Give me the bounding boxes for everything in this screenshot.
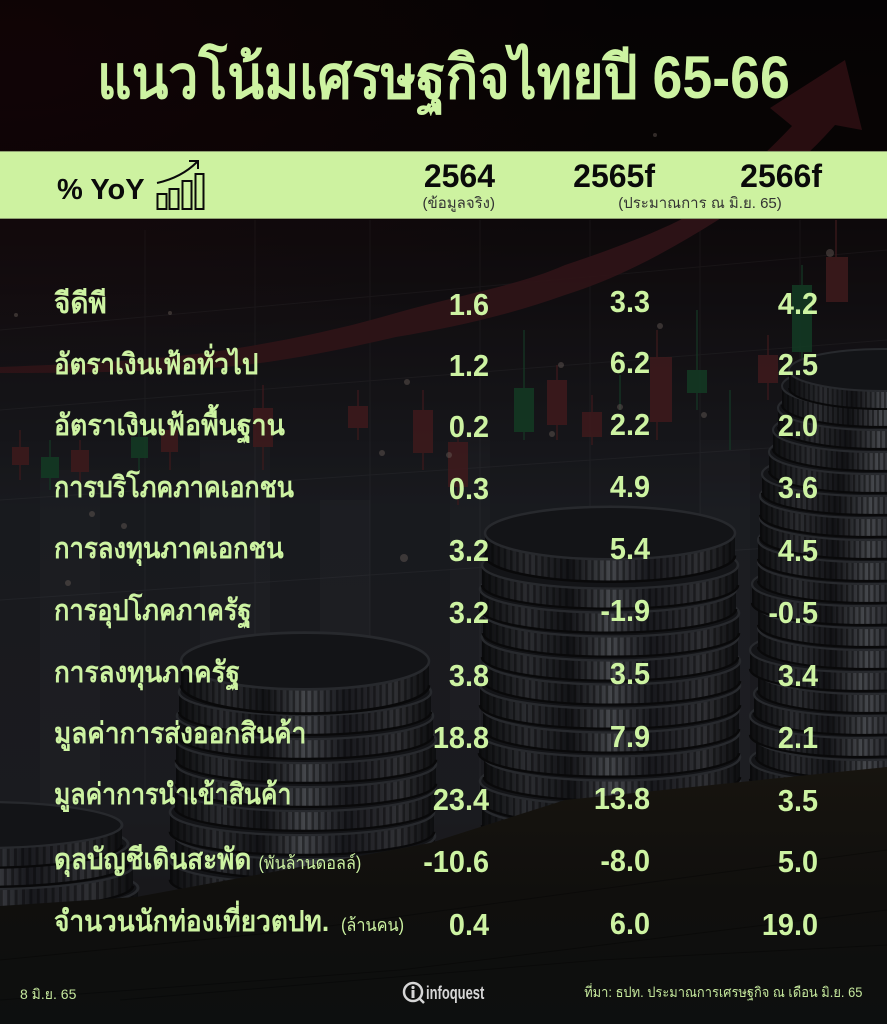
coin stack: far left [0,802,138,931]
row: GDP: 4.2 [778,286,818,321]
row: government investment: 3.8 [449,658,489,693]
row: exports [54,718,818,755]
footer date: 8 มิ.ย. 65 [20,986,76,1002]
row: government consumption: -1.9 [600,593,650,628]
row: exports: 2.1 [778,720,818,755]
row: GDP [54,284,818,322]
row: core inflation [54,404,818,444]
candlestick chart [12,220,848,505]
coin stack: far right [750,349,887,801]
row: foreign tourists [54,900,818,942]
row: imports: มูลค่าการนำเข้าสินค้า [54,779,291,811]
row: exports: 7.9 [610,719,650,754]
row: foreign tourists: จำนวนนักท่องเที่ยวตปท. (ล้านคน) [54,906,404,938]
row: exports: มูลค่าการส่งออกสินค้า [54,718,306,750]
row: core inflation: 2.2 [610,407,650,442]
title backdrop [0,0,887,150]
title: แนวโน้มเศรษฐกิจไทยปี 65-66 [97,44,790,111]
coin stack: centre [479,507,740,849]
row: private investment: 4.5 [778,533,818,568]
row: current account: -10.6 [423,844,489,879]
row: government investment [54,656,818,693]
row: foreign tourists: 6.0 [610,906,650,941]
dark overlay [0,220,887,920]
row: current account: 5.0 [778,844,818,879]
coin stack: left of centre [170,633,436,903]
row: headline inflation: 1.2 [449,348,489,383]
row: headline inflation: 6.2 [610,345,650,380]
column heading: 2566f: 2566f [740,158,822,194]
row: government consumption [54,593,818,630]
row: government consumption: -0.5 [768,595,818,630]
logo: infoquest: infoquest [426,983,484,1003]
row: private investment [54,531,818,568]
row: current account [54,843,818,879]
row: government consumption: 3.2 [449,595,489,630]
decorative light specks [14,133,834,586]
icon: bar chart with arrow [156,160,204,210]
row: headline inflation: อัตราเงินเฟ้อทั่วไป [54,349,258,381]
row: private consumption: การบริโภคภาคเอกชน [54,472,294,504]
row: exports: 18.8 [433,720,489,755]
row: private investment: 5.4 [610,531,650,566]
row: imports: 13.8 [594,781,650,816]
row: foreign tourists: 0.4 [449,907,489,942]
row: GDP: จีดีพี [54,288,107,320]
source note: ที่มา: ธปท. ประมาณการเศรษฐกิจ ณ เดือน มิ.ย. 65 [584,984,862,1000]
row: private consumption: 0.3 [449,471,489,506]
note: forecast as of June 65: (ประมาณการ ณ มิ.ย. 65) [618,195,782,212]
row: headline inflation [54,344,818,383]
row: private investment: การลงทุนภาคเอกชน [54,533,284,565]
row: GDP: 3.3 [610,284,650,319]
icon: rising red arrow [0,60,862,373]
row: imports: 3.5 [778,783,818,818]
row: core inflation: อัตราเงินเฟ้อพื้นฐาน [54,410,285,442]
logo: infoquest [402,982,484,1004]
row: private consumption: 4.9 [610,469,650,504]
data table [54,284,818,942]
row: current account: ดุลบัญชีเดินสะพัด (พันล้านดอลล์) [54,844,361,876]
note: actual data: (ข้อมูลจริง) [422,195,495,212]
row: private investment: 3.2 [449,533,489,568]
row: government investment: 3.4 [778,658,818,693]
column heading: 2564: 2564 [424,158,495,194]
wooden table [0,767,887,1024]
row: headline inflation: 2.5 [778,347,818,382]
row: government investment: การลงทุนภาครัฐ [54,657,240,689]
row: government investment: 3.5 [610,656,650,691]
row: private consumption [54,469,818,506]
row: current account: -8.0 [600,843,650,878]
row: private consumption: 3.6 [778,470,818,505]
row: government consumption: การอุปโภคภาครัฐ [54,595,252,627]
row: core inflation: 2.0 [778,408,818,443]
row: foreign tourists: 19.0 [762,907,818,942]
row: imports: 23.4 [433,782,489,817]
row: core inflation: 0.2 [449,409,489,444]
row: imports [54,779,818,818]
column heading: 2565f: 2565f [573,158,655,194]
header band [0,151,887,219]
row: GDP: 1.6 [449,287,489,322]
heading: % YoY: % YoY [57,174,145,206]
